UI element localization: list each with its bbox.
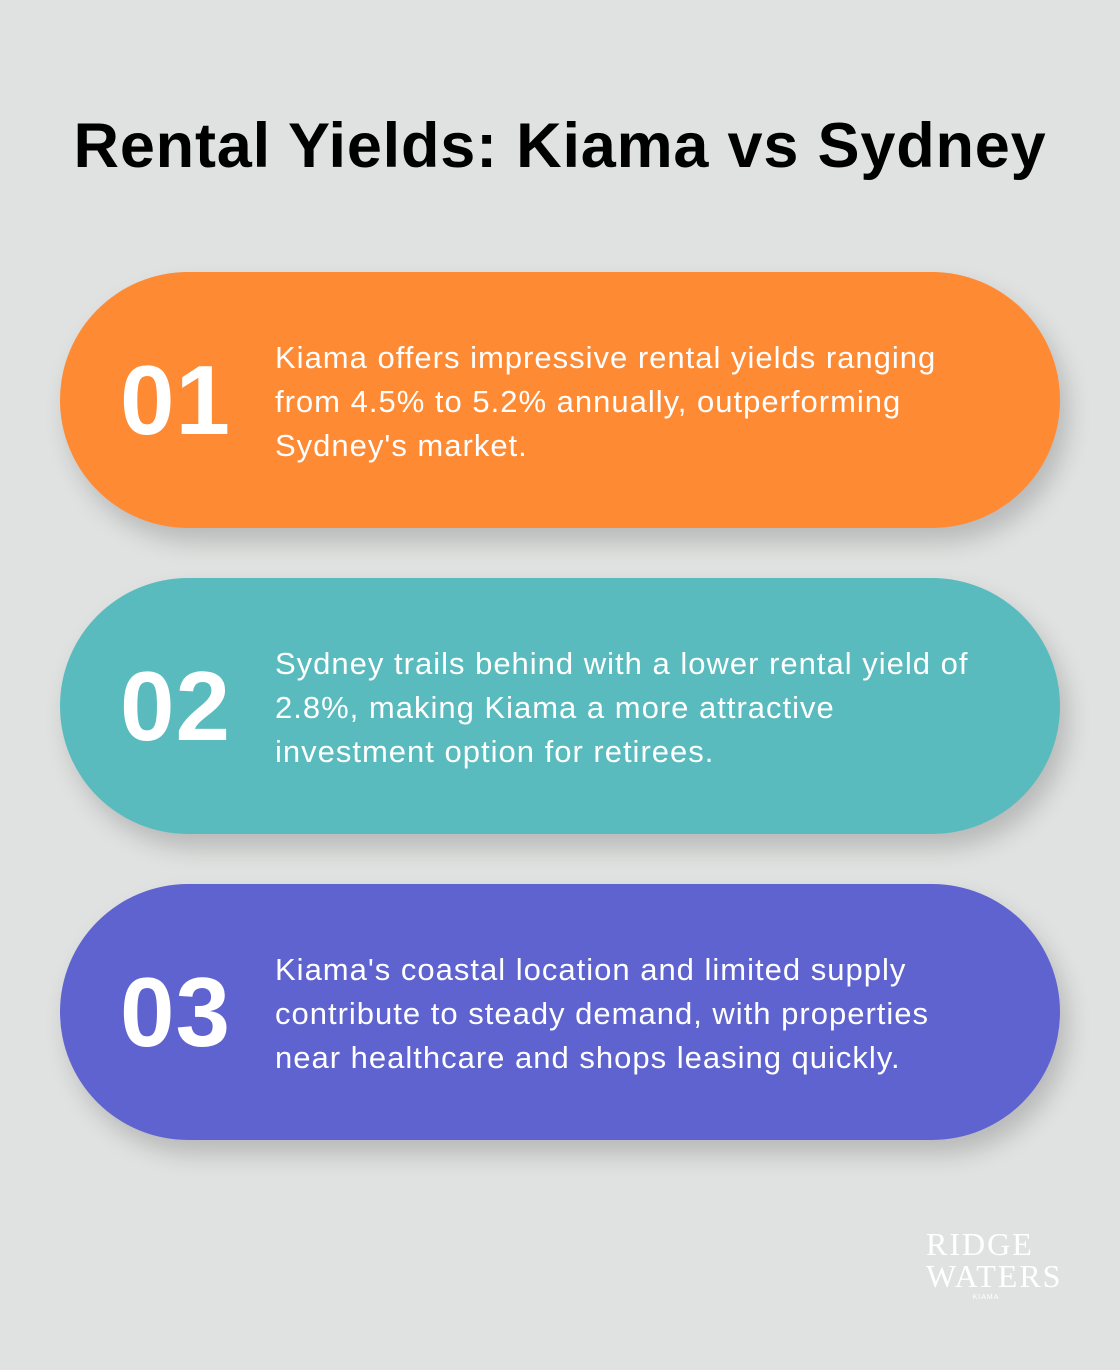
logo: WATERS bbox=[926, 1258, 1062, 1294]
text 03: contribute to steady demand, with properties bbox=[275, 996, 929, 1031]
text 02 bbox=[275, 646, 968, 769]
text 01 bbox=[275, 340, 936, 463]
text 03 bbox=[275, 952, 929, 1075]
text 03: Kiama's coastal location and limited supply bbox=[275, 952, 906, 987]
number 03: 03 bbox=[120, 957, 231, 1067]
logo: RIDGE bbox=[926, 1226, 1034, 1262]
number 02: 02 bbox=[120, 651, 231, 761]
panel: 03 bbox=[60, 884, 1060, 1140]
title: Rental Yields: Kiama vs Sydney bbox=[74, 111, 1046, 181]
number 01: 01 bbox=[120, 345, 231, 455]
panel: 02 bbox=[60, 578, 1060, 834]
logo: KIAMA bbox=[973, 1294, 999, 1301]
text 02: 2.8%, making Kiama a more attractive bbox=[275, 690, 835, 725]
text 01: Sydney's market. bbox=[275, 428, 528, 463]
text 02: investment option for retirees. bbox=[275, 734, 714, 769]
text 01: from 4.5% to 5.2% annually, outperforming bbox=[275, 384, 901, 419]
text 01: Kiama offers impressive rental yields ranging bbox=[275, 340, 936, 375]
text 03: near healthcare and shops leasing quickly. bbox=[275, 1040, 901, 1075]
panel: 01 bbox=[60, 272, 1060, 528]
logo bbox=[926, 1226, 1062, 1301]
text 02: Sydney trails behind with a lower rental yield of bbox=[275, 646, 968, 681]
